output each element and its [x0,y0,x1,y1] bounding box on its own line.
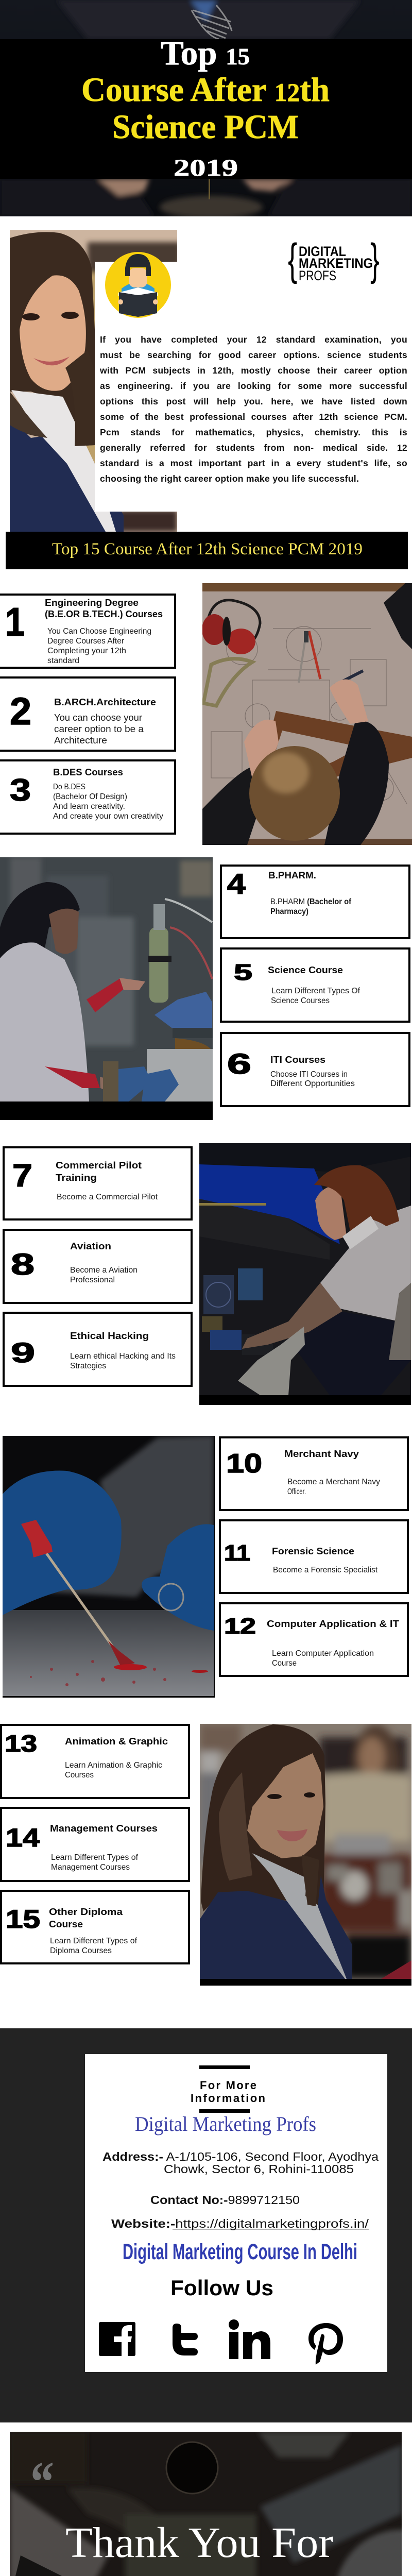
panel: course 6: Different Opportunities [270,1079,355,1088]
panel: course 2 [0,677,175,751]
panel: course 4: 4 [227,868,246,900]
panel: course 7: 7 [12,1158,32,1194]
intro paragraph: some of the best professional courses after 12th science PCM. [100,412,407,422]
panel: course 1: Completing your 12th [47,647,126,655]
panel: course 15 [1,1891,189,1963]
title [81,35,330,181]
heading: for more information: For More [200,2079,256,2092]
photo: lab scientist [0,857,213,1120]
photo: businesswoman with colleagues [200,1724,411,1986]
panel: course 6: Choose ITI Courses in [270,1070,348,1079]
panel: course 3: And learn creativity. [53,802,125,811]
panel: course 12: 12 [224,1614,256,1639]
panel: course 4: Pharmacy) [270,907,308,916]
logo: Digital Marketing Profs: MARKETING [299,256,373,271]
icon: facebook [99,2322,135,2356]
logo: Digital Marketing Profs: { [288,235,297,284]
logo: Digital Marketing Profs: DIGITAL [299,244,346,259]
panel: course 14: 14 [6,1823,40,1852]
panel: course 4: B.PHARM (Bachelor of [270,897,352,906]
panel: course 11: Forensic Science [272,1546,354,1556]
section banner [6,532,408,569]
title band [0,39,412,179]
panel: course 15: Course [49,1919,83,1929]
panel: course 12: Computer Application & IT [267,1619,399,1629]
panel: course 1: You Can Choose Engineering [47,627,151,636]
panel: course 2: career option to be a [54,724,144,734]
panel: course 2: You can choose your [54,713,142,723]
panel: course 8 [4,1230,192,1303]
company name: Digital Marketing Profs [135,2112,316,2136]
panel: course 7 [4,1147,192,1219]
panel: thank you [10,2432,412,2576]
panel: course 6: ITI Courses [270,1055,325,1065]
panel: course 10 [220,1437,408,1510]
panel: course 2: Architecture [54,735,107,745]
heading: for more information: Information [191,2092,265,2105]
panel: course 4: B.PHARM. [268,870,316,880]
header banner [0,0,412,218]
logo: Digital Marketing Profs: } [370,235,380,284]
panel: course 11: Become a Forensic Specialist [273,1566,378,1574]
intro paragraph: generally referred for students from non- medical side. 12 [100,443,407,453]
icon: pinterest [308,2323,343,2365]
intro white panel [95,262,177,512]
logo: Digital Marketing Profs: PROFS [299,268,336,283]
panel: course 14 [1,1808,189,1881]
panel: course 13: Animation & Graphic [65,1736,168,1747]
title: Top 15 [161,35,250,72]
panel: course 15: Diploma Courses [50,1946,112,1955]
panel: course 8: Aviation [70,1241,111,1251]
intro paragraph: with PCM subjects in 12th, mostly choose their career option [100,365,407,376]
follow us: Follow Us [170,2276,273,2300]
header background photo [0,0,412,218]
panel: contact background [0,2028,412,2422]
panel: course 13: Courses [65,1771,94,1780]
photo: forensic swab [3,1436,215,1698]
title: Science PCM [112,108,299,146]
panel: course 3: B.DES Courses [53,767,123,777]
panel: course 1: (B.E.OR B.TECH.) Courses [45,609,163,619]
intro paragraph: must be searching for good career options. science students [100,350,407,360]
section banner: Top 15 Course After 12th Science PCM 2019 [52,540,363,558]
icon: student reading [105,252,171,318]
panel: course 10: Officer. [287,1487,306,1496]
address: Address:- A-1/105-106, Second Floor, Ayodhya [102,2150,379,2163]
panel: course 14: Management Courses [51,1863,130,1872]
panel: course 15: Learn Different Types of [50,1937,138,1945]
photo: airline pilot in cockpit [199,1143,411,1405]
thank you background photo [10,2432,412,2576]
panel: course 3: Do B.DES [53,783,85,791]
panel: course 3: 3 [10,773,31,807]
panel: course 12 [220,1603,408,1676]
logo: Digital Marketing Profs [288,235,380,284]
panel: course 12: Learn Computer Application [272,1649,374,1658]
title: Course After 12th [81,71,330,109]
icon: twitter [173,2324,198,2355]
panel: course 14: Management Courses [50,1823,158,1834]
panel: course 2: 2 [10,690,31,733]
intro paragraph [100,334,407,484]
intro paragraph: as engineering. if you are looking for some more successful [100,381,407,391]
panel: course 15: Other Diploma [49,1907,123,1917]
panel: course 8: Professional [70,1276,115,1284]
panel: course 6: 6 [227,1047,251,1080]
address [102,2150,379,2176]
panel: course 3: And create your own creativity [53,812,163,821]
panel: course 1: standard [47,656,79,665]
panel: course 12: Course [272,1659,297,1668]
panel: course 14: Learn Different Types of [51,1853,139,1862]
panel: course 5: 5 [234,960,252,985]
panel: course 13: Learn Animation & Graphic [65,1761,162,1770]
intro paragraph: Pcm stands for mathematics, physics, chemistry. this is [100,427,407,437]
quote mark: open: “ [30,2450,54,2514]
panel: course 13: 13 [5,1730,37,1757]
panel: course 10: Become a Merchant Navy [287,1478,380,1486]
title: 2019 [174,155,238,181]
panel: course 8: Become a Aviation [70,1266,138,1275]
panel: course 7: Become a Commercial Pilot [57,1193,158,1201]
website: Website:- https://digitalmarketingprofs.in/ [111,2217,369,2230]
panel: course 9: Strategies [70,1362,106,1370]
panel: course 9: Learn ethical Hacking and Its [70,1352,176,1361]
closing message: Thank You For [65,2519,333,2567]
panel: course 1: 1 [5,599,25,645]
panel: course 7: Commercial Pilot [56,1160,142,1171]
panel: course 15: 15 [6,1905,40,1934]
panel: course 5: Learn Different Types Of [271,987,360,995]
panel: course 4 [221,866,409,938]
panel: course 7: Training [56,1173,97,1183]
panel: course 3 [0,760,175,834]
panel: course 9: 9 [11,1337,35,1368]
panel: course 5: Science Courses [271,996,330,1005]
panel: course 13 [1,1725,189,1798]
panel: course 3: (Bachelor Of Design) [53,792,127,801]
panel: course 6 [221,1033,409,1106]
panel: course 11: 11 [224,1540,250,1566]
contact card [85,2054,387,2372]
panel: course 5: Science Course [268,965,343,975]
panel: course 9 [4,1313,192,1386]
panel: course 9: Ethical Hacking [70,1331,149,1341]
address: Chowk, Sector 6, Rohini-110085 [164,2162,354,2176]
heading: for more information [191,2079,265,2105]
photo: architect drafting [202,577,412,845]
panel: course 11 [220,1520,408,1593]
intro paragraph: choosing the right career option make you life successful. [100,473,359,484]
icon: linkedin [229,2319,270,2359]
panel: course 5 [221,948,409,1022]
intro paragraph: options this post will help you. here, we have listed down [100,396,407,406]
panel: course 2: B.ARCH.Architecture [54,697,156,707]
panel: course 10: Merchant Navy [284,1449,359,1459]
intro paragraph: If you have completed your 12 standard examination, you [100,334,407,345]
panel: course 1: Engineering Degree [45,598,139,608]
panel: course 8: 8 [11,1248,35,1281]
contact number: Contact No:- 9899712150 [150,2193,300,2207]
panel: course 1: Degree Courses After [47,637,125,646]
intro paragraph: standard is a most important part in a every student's life, so [100,458,407,468]
photo: businesswoman portrait [10,230,180,532]
panel: course 1 [0,595,175,668]
panel: course 10: 10 [226,1449,262,1479]
